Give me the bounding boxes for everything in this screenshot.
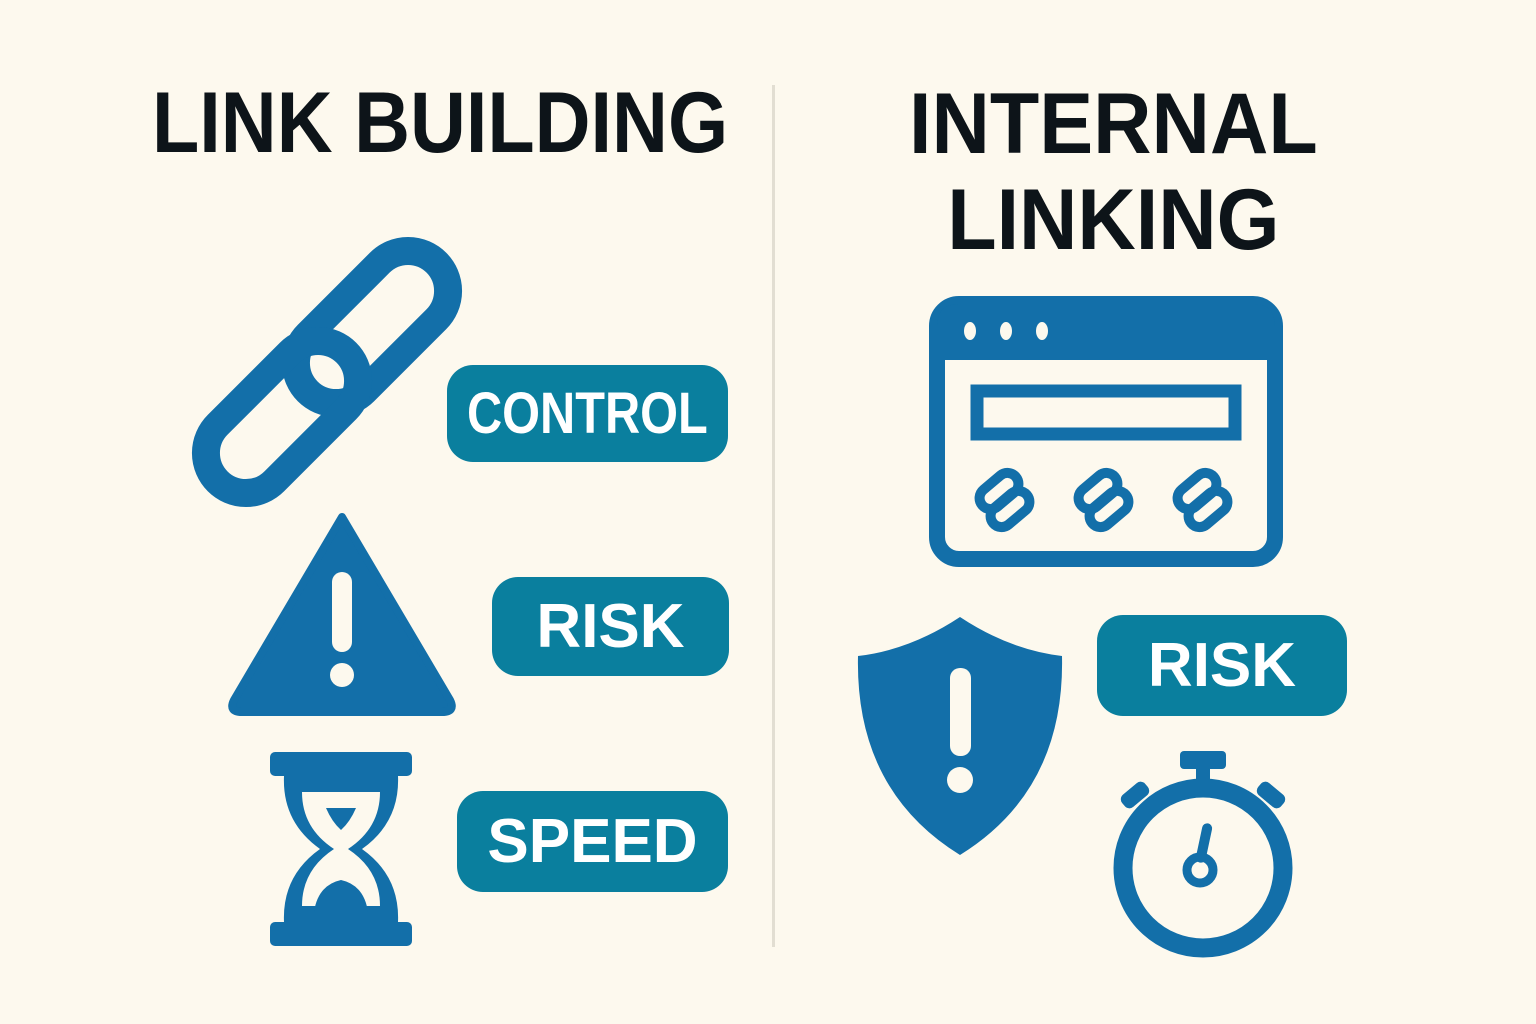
title: link building: LINK BUILDING — [152, 75, 728, 171]
pill: speed — [457, 791, 728, 892]
pill: risk left — [492, 577, 729, 676]
icon: chain — [189, 234, 465, 510]
icon: stopwatch — [1118, 751, 1288, 948]
pill: control — [447, 365, 728, 462]
icon: warning triangle — [232, 517, 452, 712]
pill: speed: SPEED — [487, 807, 698, 876]
pill: control: CONTROL — [467, 381, 708, 446]
pill: risk left: RISK — [536, 592, 685, 661]
icon: browser window — [937, 304, 1275, 559]
pill: risk right — [1097, 615, 1347, 716]
pill: risk right: RISK — [1148, 631, 1296, 700]
title: internal linking: INTERNAL — [909, 76, 1317, 172]
title: internal linking — [909, 76, 1317, 268]
icon: shield — [858, 617, 1062, 855]
title: internal linking: LINKING — [947, 172, 1279, 268]
icon: hourglass — [270, 752, 412, 946]
